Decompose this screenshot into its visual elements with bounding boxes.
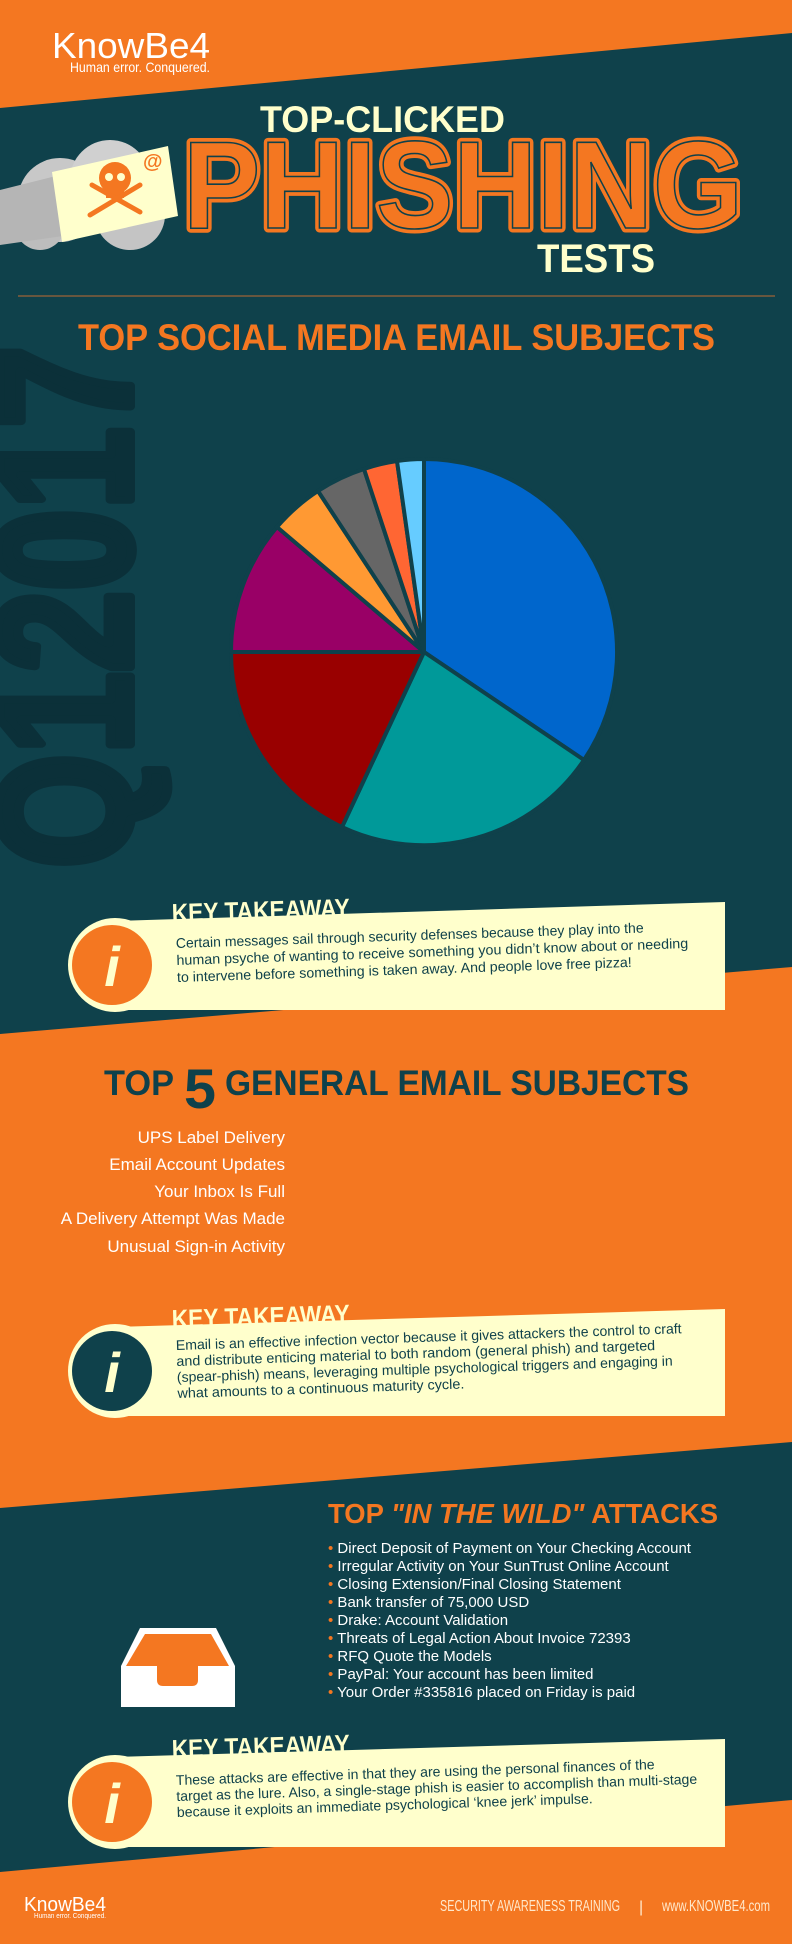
callout: key takeaway 3 xyxy=(68,1729,725,1849)
icon: info xyxy=(72,925,152,1005)
icon: info: i xyxy=(104,1772,121,1835)
list: general email subjects: Your Inbox Is Full xyxy=(154,1182,285,1201)
footer text: | xyxy=(639,1899,643,1916)
icon: cloud with phishing envelope xyxy=(0,140,178,250)
list: general email subjects: A Delivery Attempt Was Made xyxy=(61,1209,285,1228)
heading: top social media email subjects: TOP SOCIAL MEDIA EMAIL SUBJECTS xyxy=(78,317,715,358)
list: in the wild attacks: • PayPal: Your account has been limited xyxy=(328,1666,593,1683)
list: general email subjects xyxy=(61,1128,285,1256)
callout: key takeaway 3: KEY TAKEAWAY xyxy=(171,1729,350,1764)
icon: info: i xyxy=(104,1341,121,1404)
list: in the wild attacks: • Irregular Activity on Your SunTrust Online Account xyxy=(328,1558,670,1575)
callout: key takeaway 2: and distribute enticing material to both random (general phish) and targeted xyxy=(176,1337,655,1369)
callout: key takeaway 3: target as the lure. Also, a single-stage phish is easier to accomplish than multi-stage xyxy=(176,1771,698,1804)
list: in the wild attacks: • Closing Extension/Final Closing Statement xyxy=(328,1576,622,1593)
heading: top 5 general email subjects: 5 xyxy=(184,1057,216,1120)
logo: KnowBe4: Human error. Conquered. xyxy=(70,59,210,75)
pie chart xyxy=(231,459,617,845)
callout: key takeaway 2: Email is an effective infection vector because it gives attackers the control to craft xyxy=(176,1320,682,1353)
heading: top 5 general email subjects: TOP xyxy=(104,1064,174,1103)
heading: top 5 general email subjects xyxy=(104,1057,689,1120)
list: general email subjects: Email Account Updates xyxy=(109,1155,285,1174)
background: top orange band xyxy=(0,0,792,108)
heading: top in the wild attacks: TOP "IN THE WILD" ATTACKS xyxy=(328,1498,718,1529)
callout: key takeaway 3: These attacks are effective in that they are using the personal finances of the xyxy=(176,1756,655,1788)
icon: cloud with phishing envelope: @ xyxy=(143,151,163,173)
callout: key takeaway 2: what amounts to a continuous maturity cycle. xyxy=(176,1375,465,1401)
list: in the wild attacks: • RFQ Quote the Models xyxy=(328,1648,492,1665)
title: TESTS: TESTS xyxy=(537,237,655,281)
icon: inbox tray xyxy=(121,1628,235,1707)
heading: top 5 general email subjects: GENERAL EMAIL SUBJECTS xyxy=(225,1064,689,1103)
title: PHISHING: PHISHING xyxy=(183,117,743,255)
callout: key takeaway 1 xyxy=(68,893,725,1012)
callout: key takeaway 1: Certain messages sail through security defenses because they play into the xyxy=(176,919,644,951)
callout: key takeaway 1: to intervene before something is taken away. And people love free pizza! xyxy=(177,954,632,985)
background: footer orange band xyxy=(0,1800,792,1944)
footer logo: KnowBe4 xyxy=(24,1894,106,1916)
icon: info xyxy=(72,1762,152,1842)
list: in the wild attacks: • Threats of Legal Action About Invoice 72393 xyxy=(328,1630,631,1647)
callout: key takeaway 2: (spear-phish) means, leveraging multiple psychological triggers and engaging in xyxy=(177,1353,673,1385)
callout: key takeaway 1: human psyche of wanting to receive something you didn’t know about or needing xyxy=(176,935,688,968)
list: in the wild attacks: • Direct Deposit of Payment on Your Checking Account xyxy=(328,1540,692,1557)
list: in the wild attacks: • Bank transfer of 75,000 USD xyxy=(328,1594,529,1611)
list: in the wild attacks: • Your Order #335816 placed on Friday is paid xyxy=(328,1684,635,1701)
logo: KnowBe4: KnowBe4 xyxy=(52,25,210,66)
list: general email subjects: UPS Label Delivery xyxy=(138,1128,285,1147)
icon: info xyxy=(72,1331,152,1411)
icon: info: i xyxy=(104,935,121,998)
title: TOP-CLICKED: TOP-CLICKED xyxy=(260,99,505,140)
callout: key takeaway 2: KEY TAKEAWAY xyxy=(171,1299,350,1334)
title: PHISHING: PHISHING xyxy=(183,117,743,255)
list: in the wild attacks xyxy=(328,1540,692,1701)
footer logo: Human error. Conquered. xyxy=(34,1913,106,1920)
callout: key takeaway 3: because it exploits an immediate psychological ‘knee jerk’ impulse. xyxy=(177,1790,593,1820)
footer text: SECURITY AWARENESS TRAINING xyxy=(440,1898,620,1915)
list: in the wild attacks: • Drake: Account Validation xyxy=(328,1612,508,1629)
callout: key takeaway 2 xyxy=(68,1299,725,1418)
background: middle orange band xyxy=(0,967,792,1508)
list: general email subjects: Unusual Sign-in Activity xyxy=(107,1237,285,1256)
callout: key takeaway 1: KEY TAKEAWAY xyxy=(171,893,350,928)
